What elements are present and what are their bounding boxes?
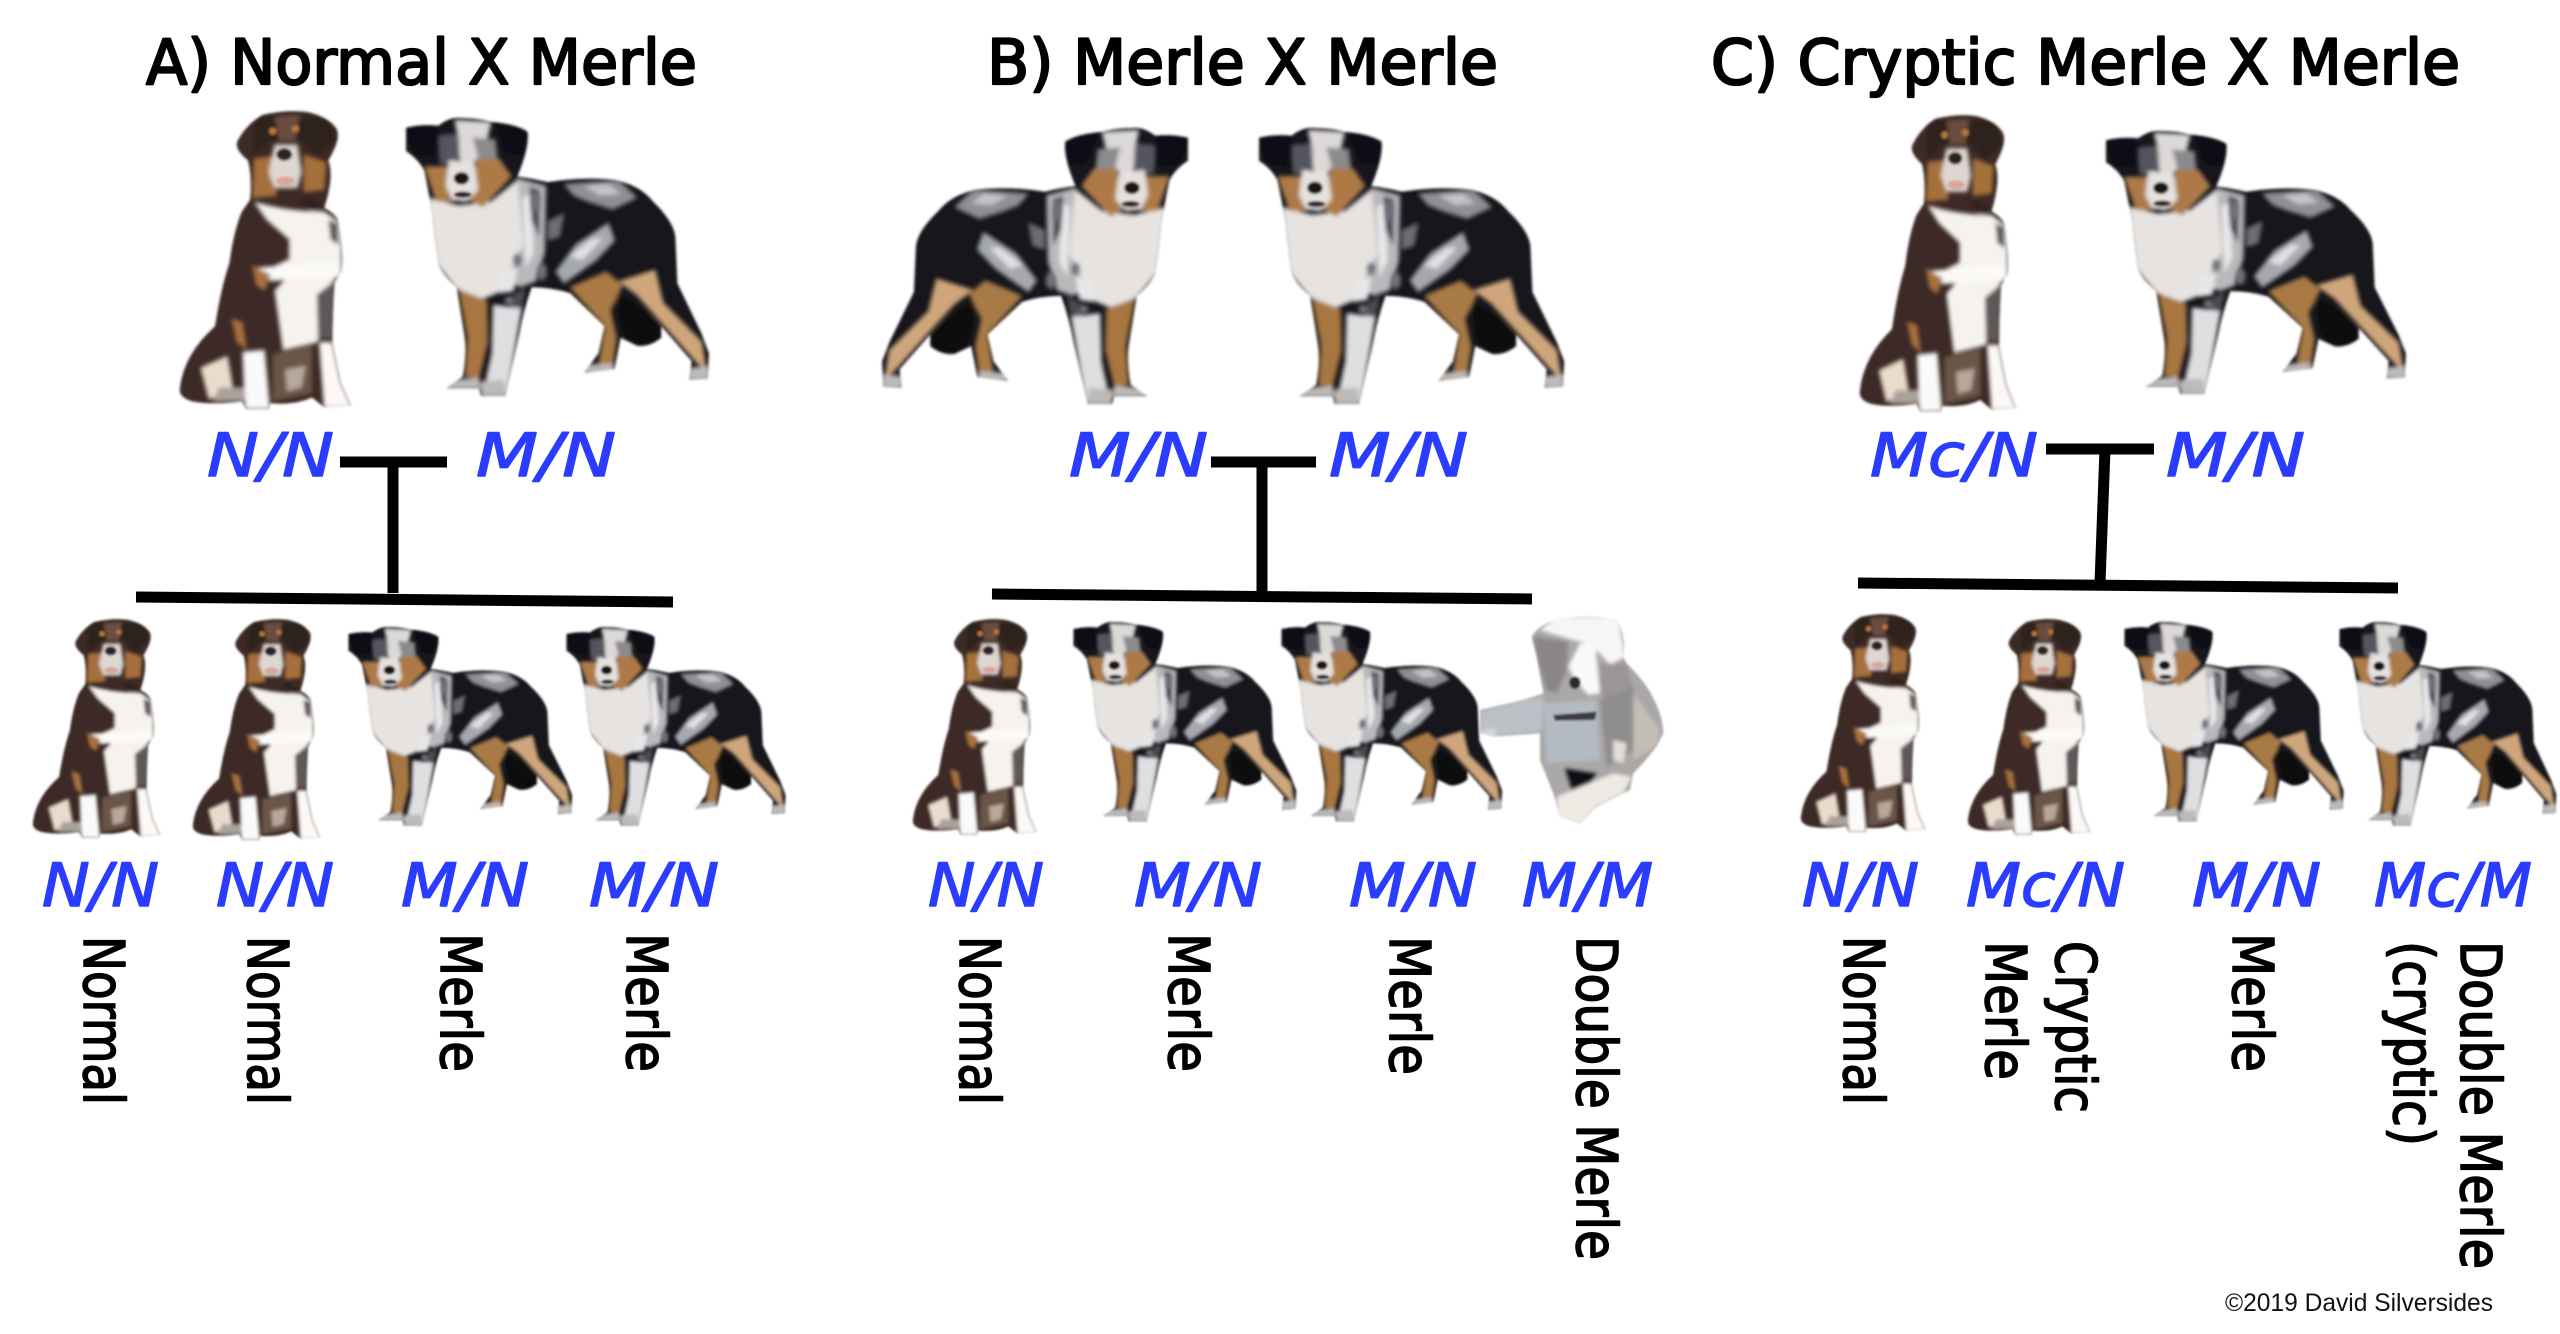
parent genotype M/N: M/N bbox=[476, 421, 616, 491]
phenotype label 1: Normal bbox=[1830, 936, 1895, 1105]
offspring genotype 1: N/N bbox=[928, 851, 1044, 921]
phenotype label 4: Merle bbox=[613, 933, 678, 1072]
cross connector B bbox=[992, 462, 1532, 599]
copyright note: ©2019 David Silversides bbox=[2225, 1289, 2493, 1317]
offspring dog 4 bbox=[561, 623, 792, 829]
parent genotype N/N: N/N bbox=[207, 421, 334, 491]
cross connector A bbox=[136, 462, 673, 602]
offspring dog 4: double merle bbox=[1479, 616, 1664, 824]
parent dog: normal bbox=[172, 105, 361, 417]
offspring genotype 4: M/N bbox=[589, 851, 719, 921]
parent genotype M/N right: M/N bbox=[1329, 421, 1468, 491]
offspring dog 2 bbox=[1962, 615, 2098, 841]
cross connector C bbox=[1858, 449, 2398, 588]
parent genotype Mc/N: Mc/N bbox=[1870, 421, 2038, 491]
offspring genotype 1: N/N bbox=[1802, 851, 1919, 921]
offspring dog 1 bbox=[1795, 610, 1933, 838]
phenotype label 3: Merle bbox=[427, 933, 492, 1072]
phenotype label 2: Cryptic Merle: Cryptic bbox=[2042, 941, 2107, 1113]
title B: B) Merle X Merle bbox=[987, 26, 1498, 99]
offspring dog 1 bbox=[907, 615, 1044, 841]
offspring genotype 2: Mc/N bbox=[1966, 851, 2125, 921]
phenotype label 2: Merle bbox=[1155, 933, 1220, 1072]
title C: C) Cryptic Merle X Merle bbox=[1711, 26, 2460, 99]
phenotype label 1: Normal bbox=[946, 936, 1011, 1105]
phenotype label 4: Double Merle (cryptic): Double Merle bbox=[2447, 941, 2512, 1269]
offspring genotype 2: N/N bbox=[216, 851, 334, 921]
phenotype label 3: Merle bbox=[1376, 936, 1441, 1075]
offspring dog 3 bbox=[1276, 618, 1509, 824]
phenotype label 1: Normal bbox=[70, 936, 135, 1105]
offspring dog 4 bbox=[2334, 618, 2560, 829]
offspring genotype 4: Mc/M bbox=[2374, 851, 2532, 921]
offspring genotype 2: M/N bbox=[1134, 851, 1262, 921]
panel B: Merle X Merle bbox=[873, 26, 1673, 1260]
phenotype label 2: Cryptic Merle: Merle bbox=[1972, 941, 2037, 1080]
phenotype label 2: Normal bbox=[234, 936, 299, 1105]
phenotype label 2: Cryptic Merle bbox=[1972, 941, 2107, 1113]
panel A: Normal X Merle bbox=[27, 26, 792, 1105]
parent dog: cryptic merle bbox=[1852, 109, 2025, 420]
phenotype label 4: Double Merle (cryptic) bbox=[2380, 941, 2512, 1269]
offspring genotype 3: M/N bbox=[1349, 851, 1477, 921]
phenotype label 4: Double Merle (cryptic): (cryptic) bbox=[2380, 941, 2445, 1146]
offspring genotype 3: M/N bbox=[2192, 851, 2321, 921]
offspring genotype 3: M/N bbox=[401, 851, 529, 921]
offspring dog 2 bbox=[187, 615, 328, 846]
title A: A) Normal X Merle bbox=[146, 26, 697, 99]
offspring genotype 4: M/M bbox=[1522, 851, 1653, 921]
parent dog: merle mirrored bbox=[873, 122, 1196, 408]
offspring dog 1 bbox=[27, 615, 168, 844]
phenotype label 3: Merle bbox=[2219, 933, 2284, 1072]
offspring dog 3 bbox=[343, 623, 579, 829]
offspring dog 2 bbox=[1068, 618, 1303, 824]
offspring genotype 1: N/N bbox=[42, 851, 159, 921]
parent dog: merle bbox=[398, 112, 718, 400]
offspring dog 3 bbox=[2119, 618, 2350, 824]
parent genotype M/N: M/N bbox=[2166, 421, 2305, 491]
phenotype label 4: Double Merle bbox=[1563, 936, 1628, 1260]
parent genotype M/N left: M/N bbox=[1069, 421, 1208, 491]
parent dog: merle bbox=[2098, 125, 2415, 398]
panel C: Cryptic Merle X Merle bbox=[1711, 26, 2560, 1269]
parent dog: merle bbox=[1251, 122, 1573, 408]
